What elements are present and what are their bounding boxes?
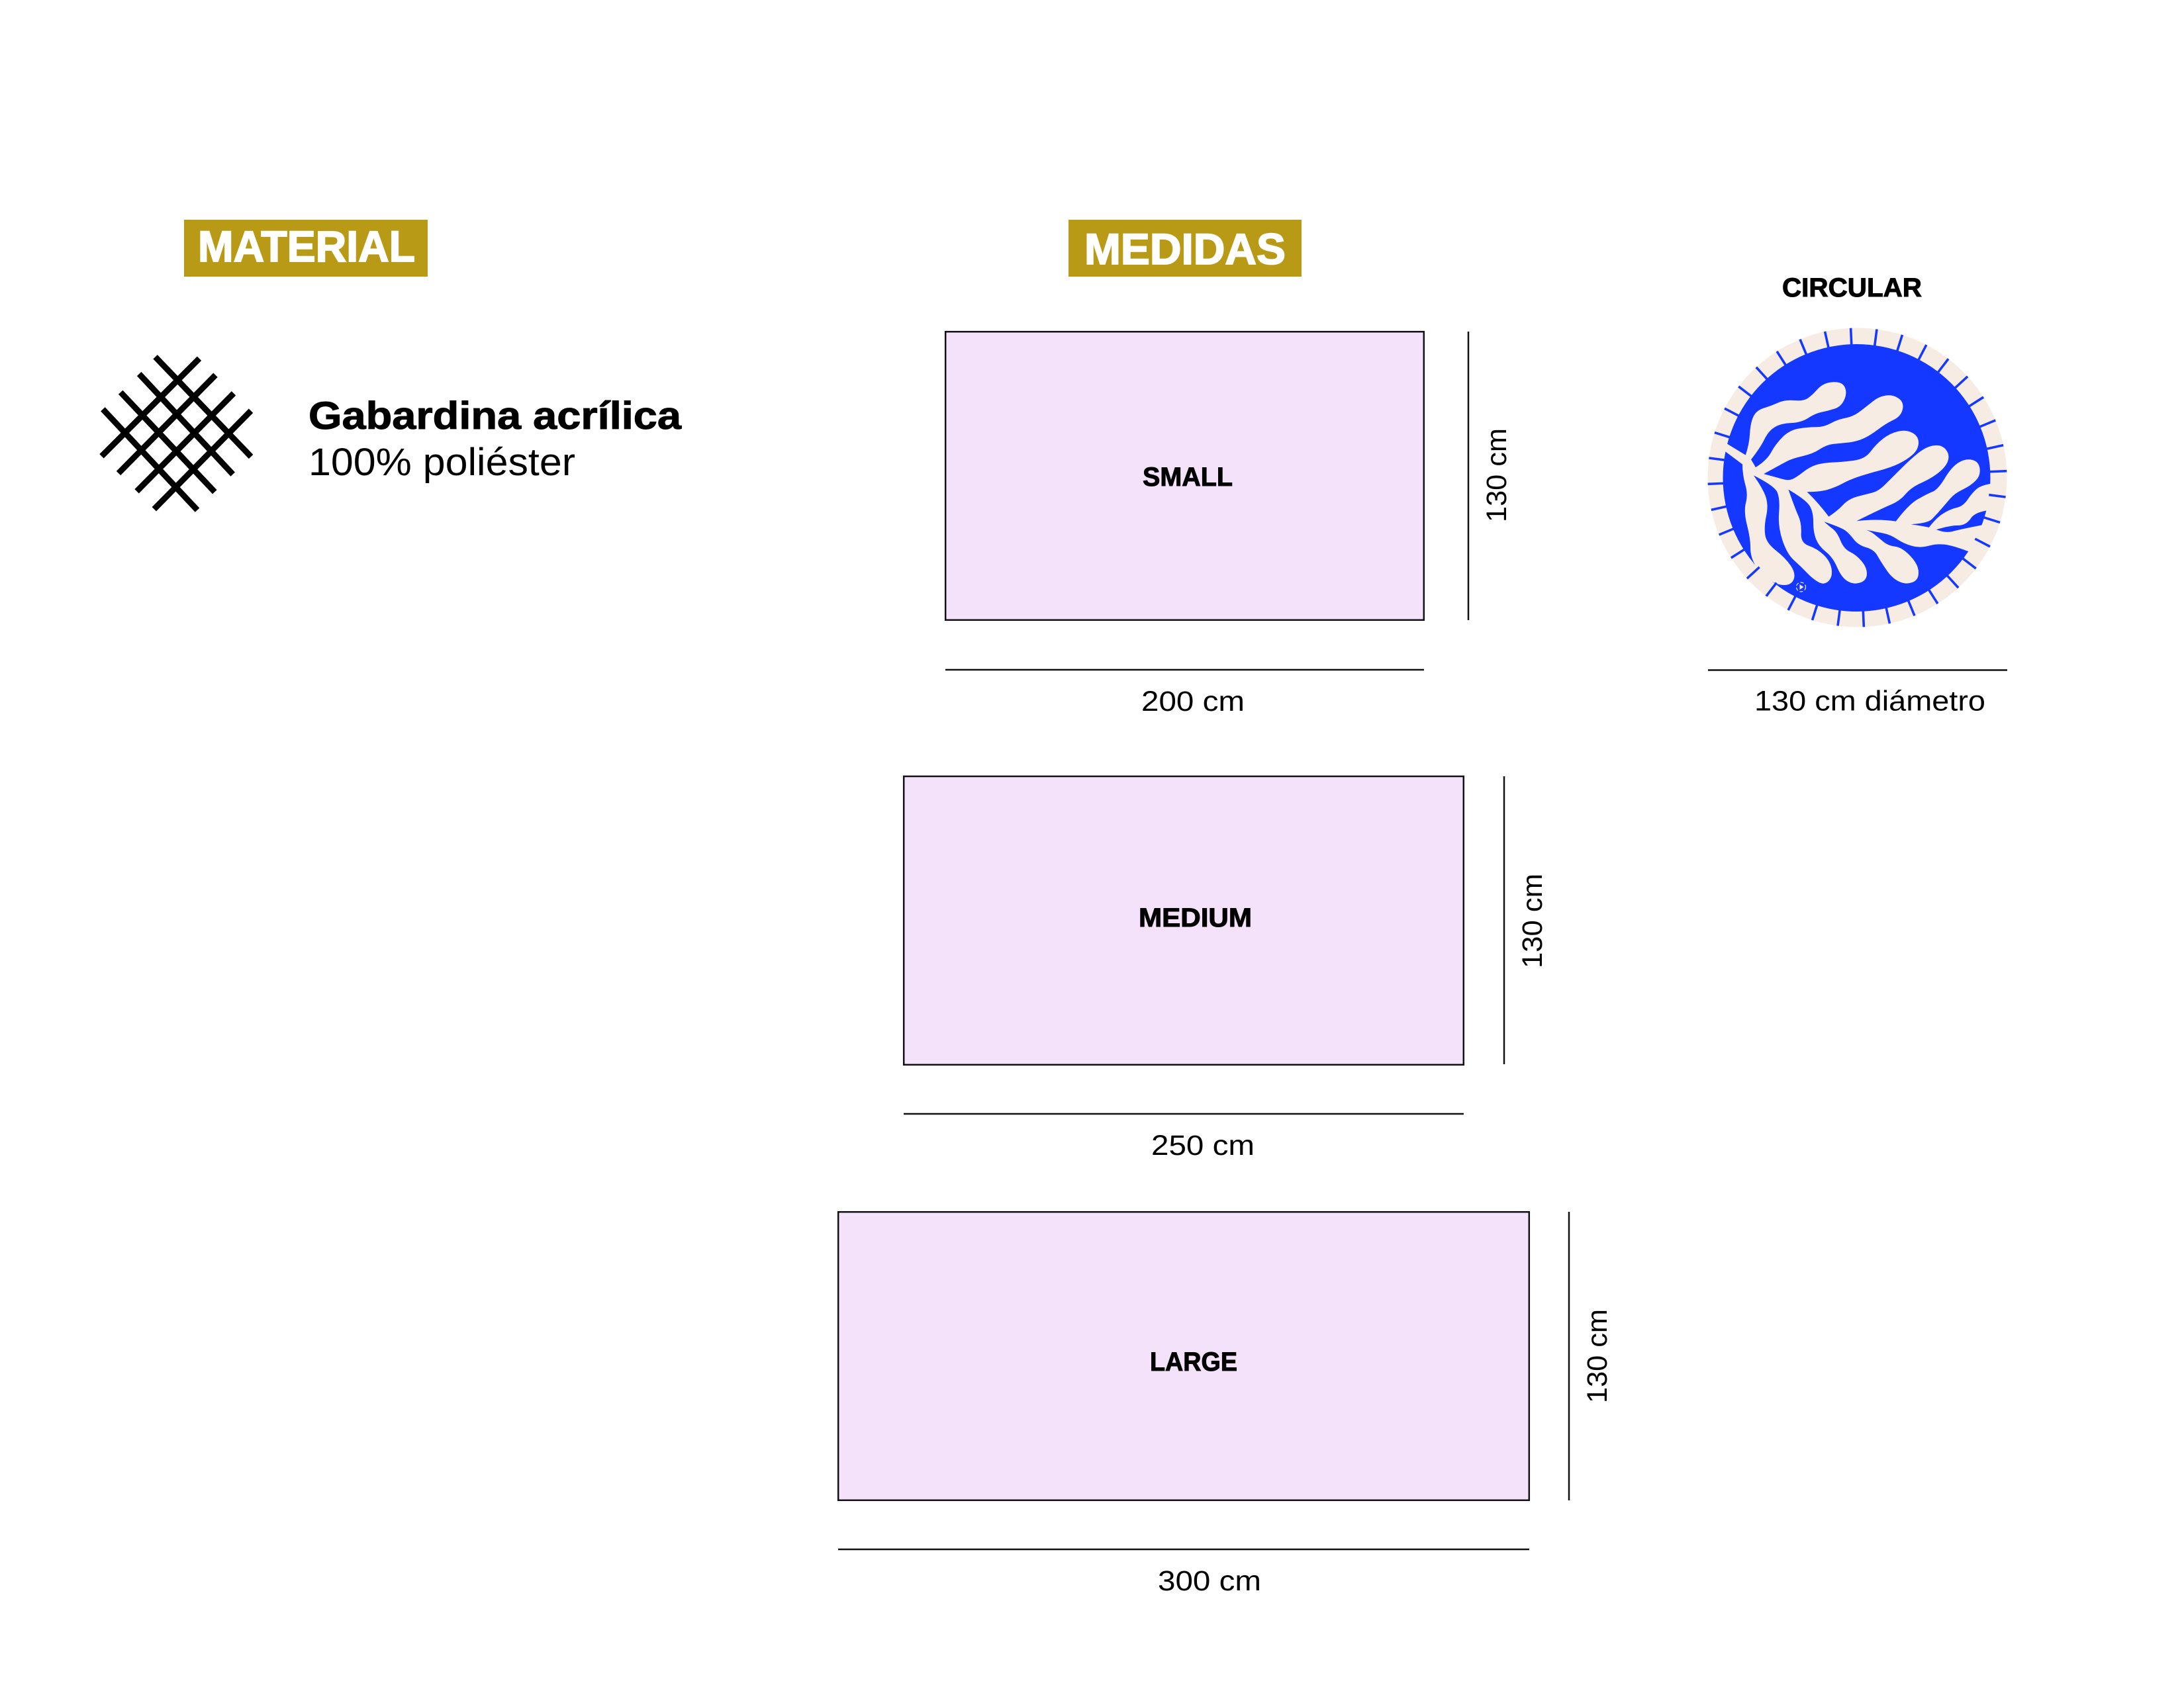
large rectangle xyxy=(838,1212,1529,1500)
height label: 130 cm xyxy=(1582,1309,1613,1403)
width dimension line xyxy=(838,1549,1529,1550)
label: CIRCULAR: CIRCULAR xyxy=(1782,273,1922,302)
small rectangle xyxy=(945,332,1424,620)
width label: 300 cm xyxy=(1158,1565,1261,1597)
icon: woven fabric lattice xyxy=(102,357,251,510)
label: LARGE: LARGE xyxy=(1150,1347,1237,1377)
width dimension line xyxy=(904,1113,1464,1115)
width label: 250 cm xyxy=(1151,1130,1255,1162)
text: material description: 100% poliéster xyxy=(309,441,575,484)
height dimension line xyxy=(1468,332,1469,620)
illustration: circular rug with leaf pattern xyxy=(1708,328,2007,627)
width label: 200 cm xyxy=(1141,686,1245,717)
height dimension line xyxy=(1568,1212,1570,1500)
diameter label: 130 cm diámetro xyxy=(1754,686,1985,717)
label: SMALL: SMALL xyxy=(1143,463,1233,492)
diameter dimension line xyxy=(1708,669,2007,671)
height label: 130 cm xyxy=(1517,874,1548,968)
height label: 130 cm xyxy=(1481,428,1513,522)
width dimension line xyxy=(945,669,1424,670)
heading: MATERIAL: MATERIAL xyxy=(198,222,415,271)
heading: MEDIDAS: MEDIDAS xyxy=(1084,224,1286,273)
panel: circular size xyxy=(1708,273,2007,717)
medium rectangle xyxy=(904,776,1464,1065)
panel: large size xyxy=(838,1212,1613,1597)
panel: small size xyxy=(945,332,1513,717)
label: MEDIUM: MEDIUM xyxy=(1139,903,1252,933)
text: material description xyxy=(309,394,682,484)
height dimension line xyxy=(1503,776,1505,1064)
text: material description: Gabardina acrílica xyxy=(309,394,682,437)
panel: medium size xyxy=(904,776,1548,1162)
